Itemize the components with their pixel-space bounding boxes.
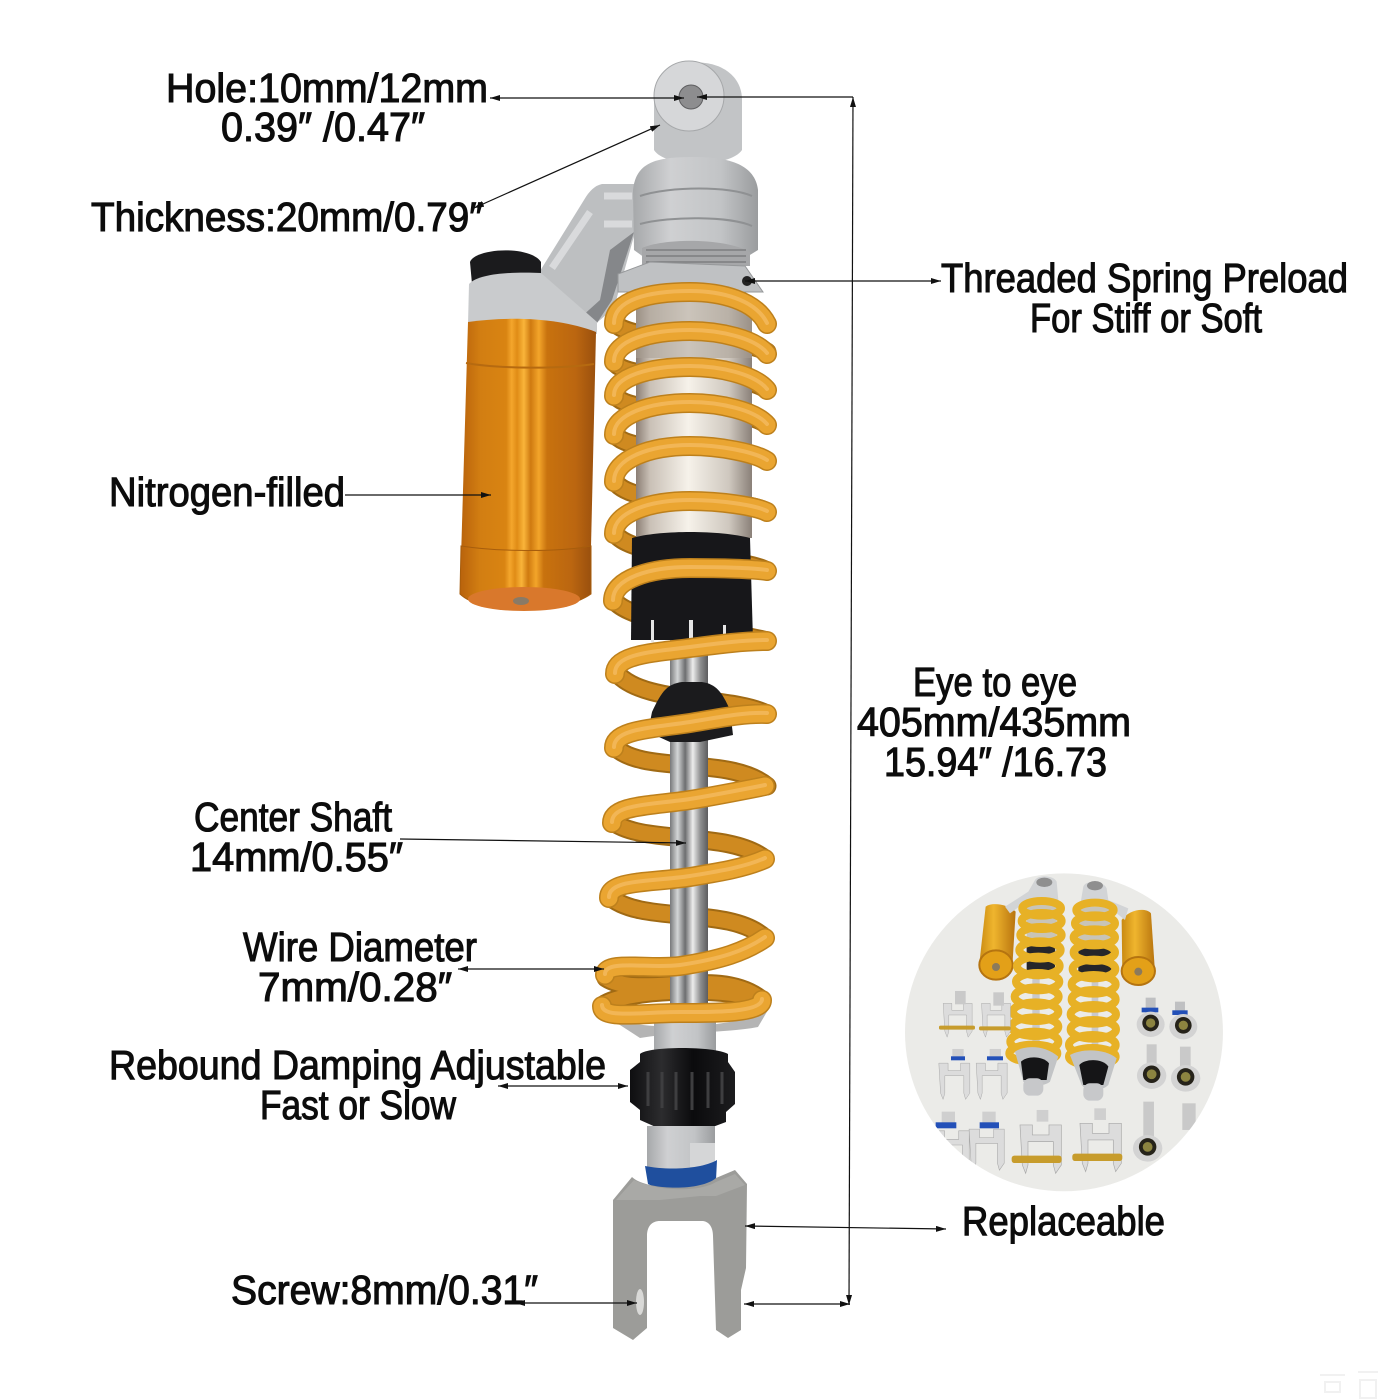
- adjuster collar: [633, 157, 758, 258]
- label: thickness: Thickness:20mm/0.79″: [91, 194, 483, 240]
- label: center shaft: 14mm/0.55″: [190, 834, 403, 880]
- arrow: wire diameter: [458, 968, 604, 970]
- arrow: nitrogen: [345, 494, 491, 496]
- label: screw: Screw:8mm/0.31″: [231, 1267, 538, 1313]
- rubber bump stop: [648, 682, 733, 742]
- arrow: eye to eye: [849, 97, 853, 1305]
- preload lock screw: [742, 276, 752, 286]
- nitrogen reservoir body: [460, 319, 596, 608]
- blue nut: [645, 1160, 717, 1190]
- label: replaceable: Replaceable: [962, 1198, 1165, 1244]
- eye face: [654, 61, 724, 131]
- arrow: preload: [745, 280, 941, 282]
- label: hole: Hole:10mm/12mm: [166, 65, 488, 111]
- label: threaded spring preload: Threaded Spring Preload: [941, 255, 1348, 301]
- inset right reservoir: [1122, 910, 1155, 985]
- knob ribs: [648, 1072, 722, 1110]
- label: hole: [166, 65, 488, 150]
- arm underside shadow: [580, 232, 634, 326]
- label: center shaft: [190, 794, 403, 880]
- label: threaded spring preload: [941, 255, 1348, 341]
- inset disc: [905, 873, 1223, 1191]
- shock absorber main product: [460, 61, 768, 1340]
- flat on lower body: [690, 1143, 715, 1167]
- thread lines: [646, 250, 746, 262]
- inset left reservoir: [979, 904, 1016, 980]
- arrow: hole right: [697, 96, 853, 98]
- dimension arrows: [345, 97, 946, 1305]
- label: eye to eye: 15.94″ /16.73: [884, 739, 1107, 785]
- collar band highlights: [640, 188, 752, 196]
- inset forks row 3: [934, 1108, 1122, 1173]
- rebound adjuster knob: [630, 1048, 735, 1128]
- inset eye ends: [1133, 998, 1200, 1162]
- inner cylinder: [636, 296, 752, 538]
- label: rebound damping: Fast or Slow: [260, 1082, 456, 1128]
- arrow: center shaft: [400, 839, 686, 843]
- back coils: [602, 322, 767, 1006]
- inset right shock: [1069, 881, 1128, 1101]
- remote reservoir arm: [540, 184, 634, 326]
- inset left shock: [1005, 876, 1062, 1096]
- eye body: [654, 62, 742, 164]
- fork bolt holes: [636, 1289, 644, 1315]
- arrow: replaceable: [745, 1226, 946, 1229]
- arrow: hole left: [490, 97, 684, 99]
- lower silver body: [647, 1126, 715, 1170]
- inset forks row 2: [939, 1049, 1007, 1099]
- arrow: thickness: [474, 125, 660, 208]
- center shaft: [670, 640, 708, 1020]
- arrow: rebound: [498, 1085, 628, 1087]
- label: eye to eye: [857, 659, 1131, 785]
- reservoir silver head: [468, 273, 597, 334]
- inset forks row 1: [939, 991, 1011, 1037]
- arrow: lower eye: [744, 1303, 850, 1305]
- label: nitrogen: Nitrogen-filled: [109, 469, 345, 515]
- label: wire diameter: Wire Diameter: [243, 924, 477, 970]
- label: eye to eye: 405mm/435mm: [857, 699, 1131, 745]
- bottom spring plate: [606, 1010, 768, 1038]
- threaded section: [642, 241, 750, 266]
- cylinder threads: [636, 296, 752, 358]
- front coils: [602, 292, 767, 1015]
- reservoir groove: [466, 363, 594, 368]
- collar lower band: [640, 218, 752, 226]
- faint watermark: [1320, 1372, 1378, 1398]
- sleeve slots: [651, 620, 726, 643]
- label: center shaft: Center Shaft: [194, 794, 393, 840]
- fork top face: [616, 1174, 745, 1200]
- label: hole: 0.39″ /0.47″: [221, 104, 425, 150]
- inset: replaceable parts: [905, 873, 1223, 1191]
- label: wire diameter: [243, 924, 477, 1010]
- plate neck: [654, 1022, 716, 1052]
- label: wire diameter: 7mm/0.28″: [258, 964, 452, 1010]
- arrow: screw: [515, 1302, 637, 1304]
- reservoir screw: [513, 597, 529, 605]
- reservoir bottom band: [460, 546, 591, 610]
- label: rebound damping: Rebound Damping Adjustable: [109, 1042, 606, 1088]
- preload ring: [618, 262, 763, 292]
- lower clevis fork: [613, 1170, 747, 1340]
- eye hole: [679, 85, 703, 109]
- black bump sleeve: [631, 532, 753, 640]
- reservoir base plate: [468, 587, 580, 611]
- reservoir black cap: [470, 250, 541, 286]
- label: eye to eye: Eye to eye: [913, 659, 1077, 705]
- arm highlight: [552, 196, 632, 268]
- label: threaded spring preload: For Stiff or Soft: [1030, 295, 1263, 341]
- label: rebound damping: [109, 1042, 606, 1128]
